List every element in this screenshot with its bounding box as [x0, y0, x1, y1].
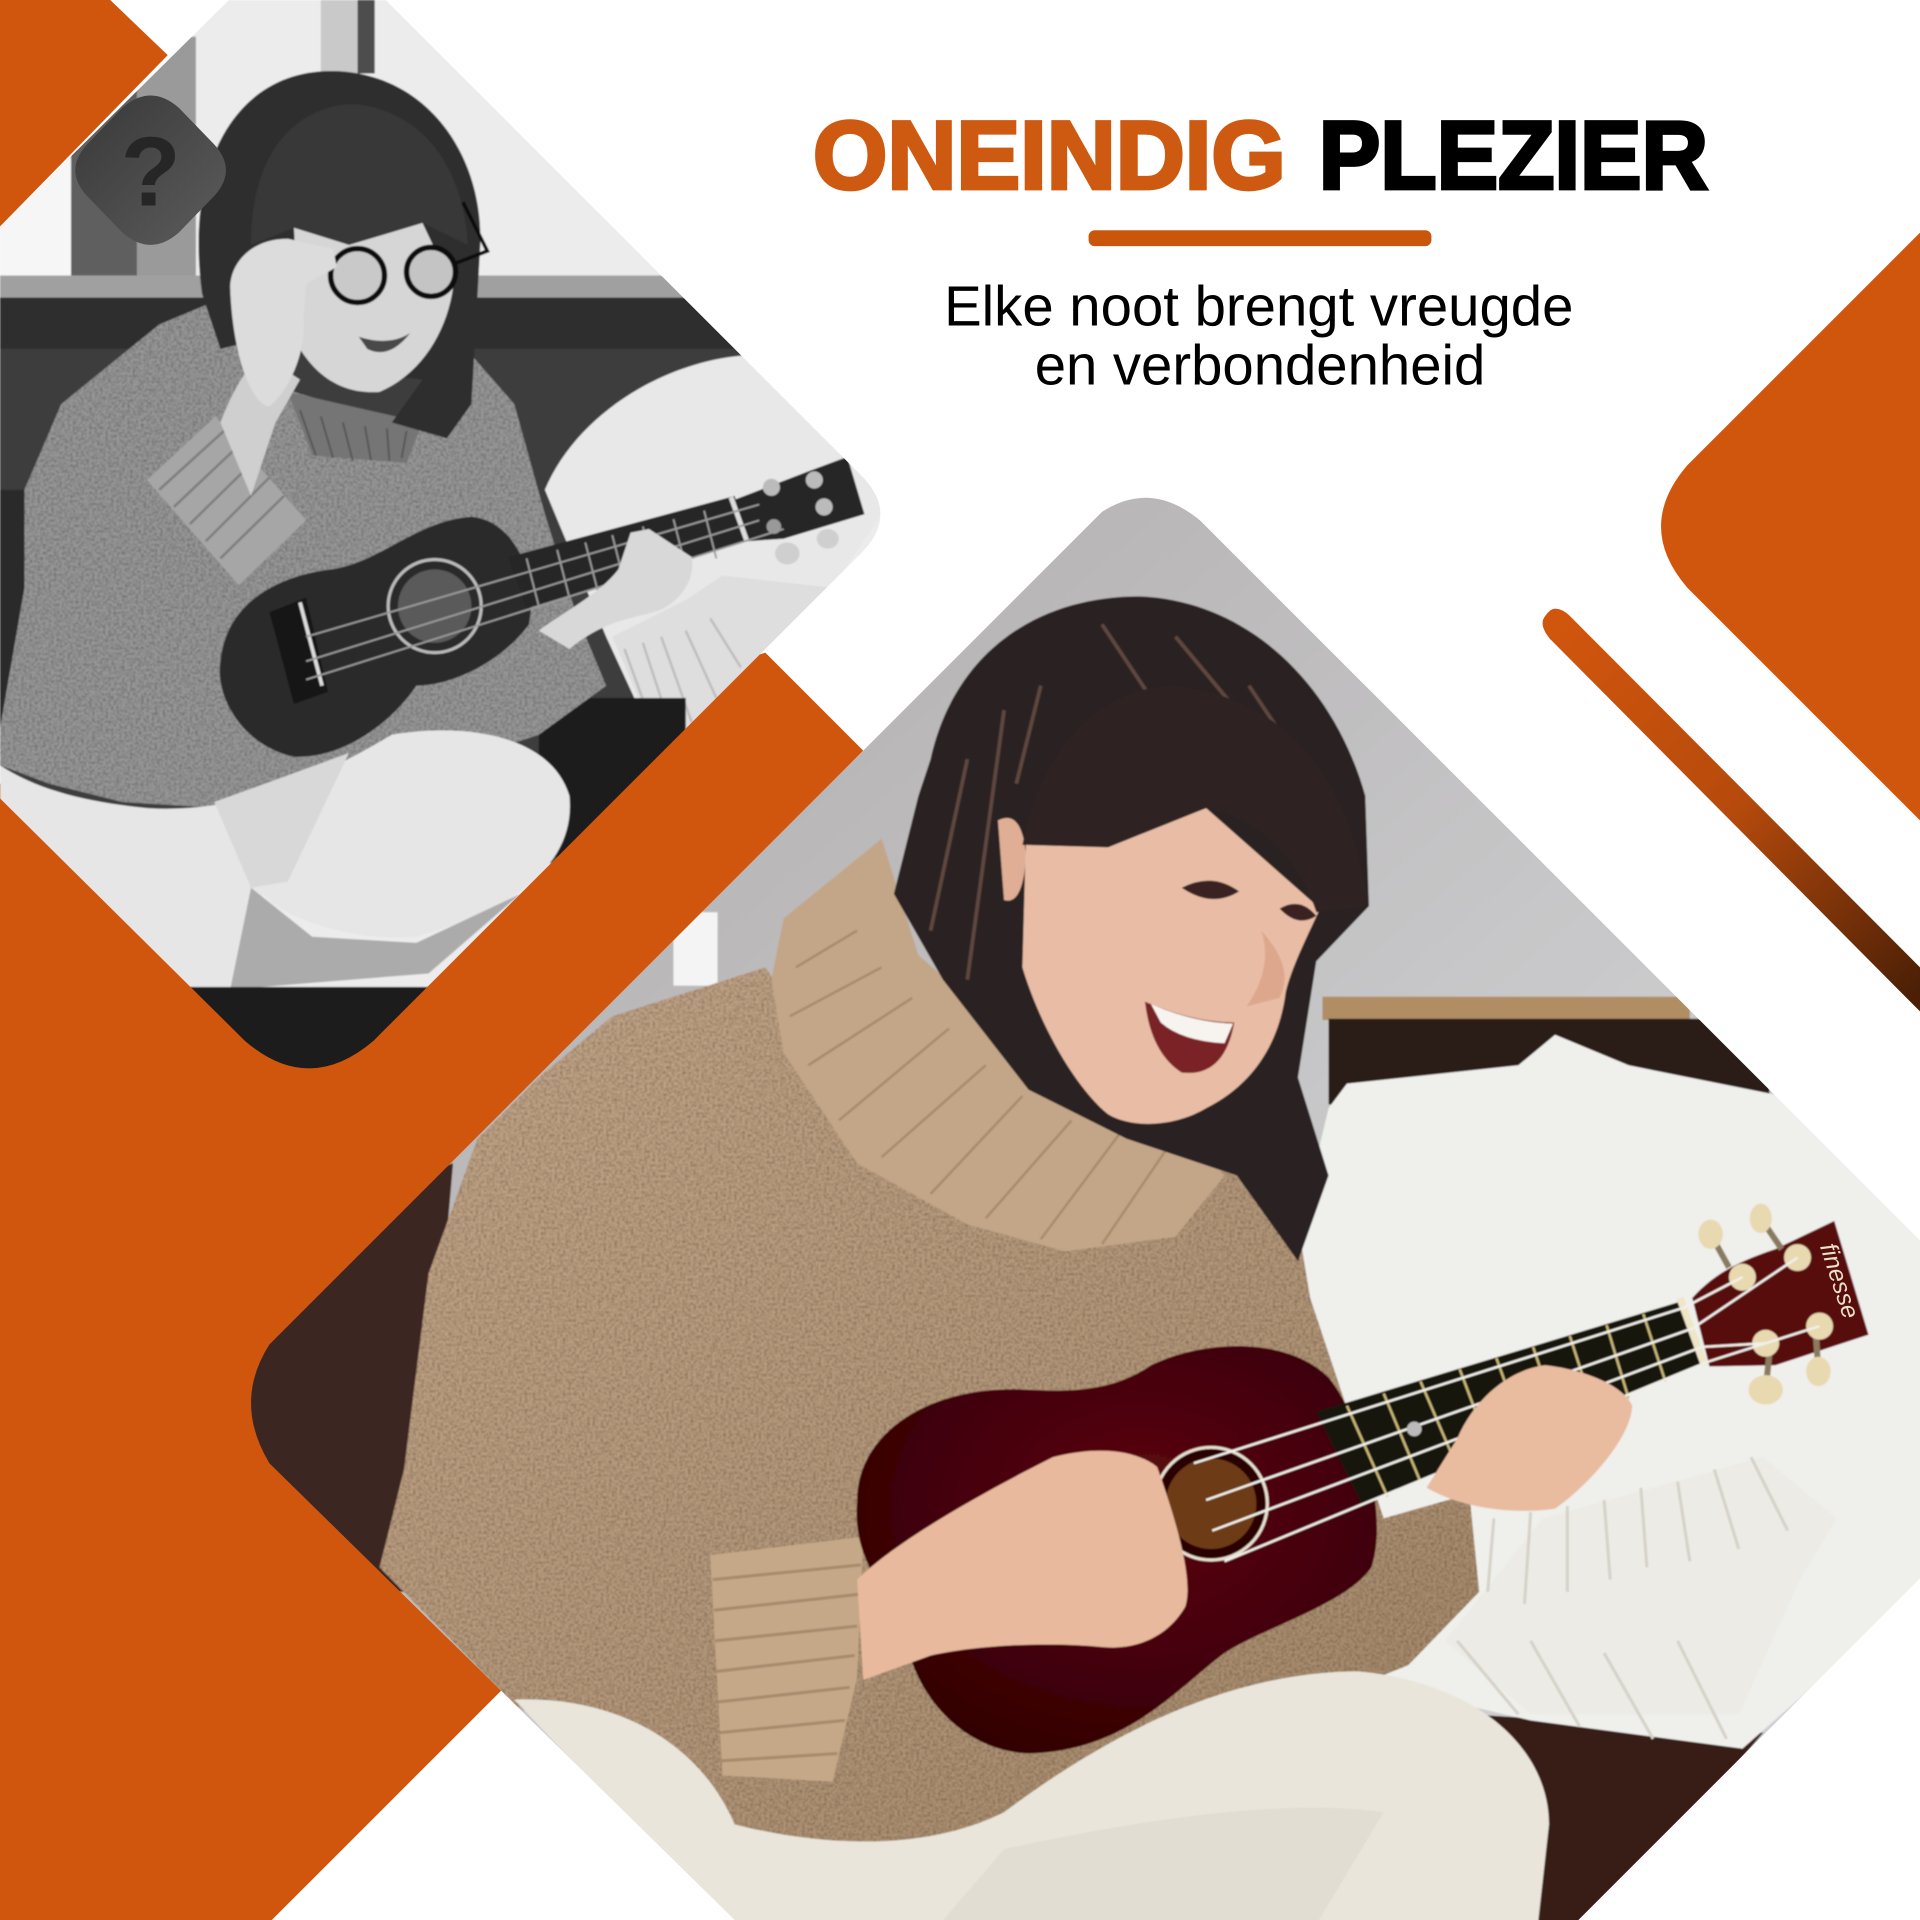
title: PLEZIER	[1319, 102, 1708, 210]
fine print on ukulele: finesse	[1814, 1240, 1864, 1322]
photo: colour woman playing ukulele	[220, 478, 1920, 1920]
title underline	[1089, 230, 1431, 246]
icon: question mark badge: ?	[121, 117, 181, 227]
subtitle	[944, 275, 1573, 396]
diagonal stripe	[1543, 609, 1920, 1011]
orange corner top left	[0, 0, 168, 227]
title	[813, 102, 1708, 210]
orange shape right	[1661, 233, 1920, 820]
icon: question mark badge	[75, 96, 226, 245]
photo: black and white woman with glasses	[0, 0, 906, 1085]
title: ONEINDIG	[813, 102, 1286, 210]
large orange shape	[0, 653, 863, 1920]
subtitle: en verbondenheid	[1035, 333, 1485, 396]
subtitle: Elke noot brengt vreugde	[944, 275, 1573, 338]
